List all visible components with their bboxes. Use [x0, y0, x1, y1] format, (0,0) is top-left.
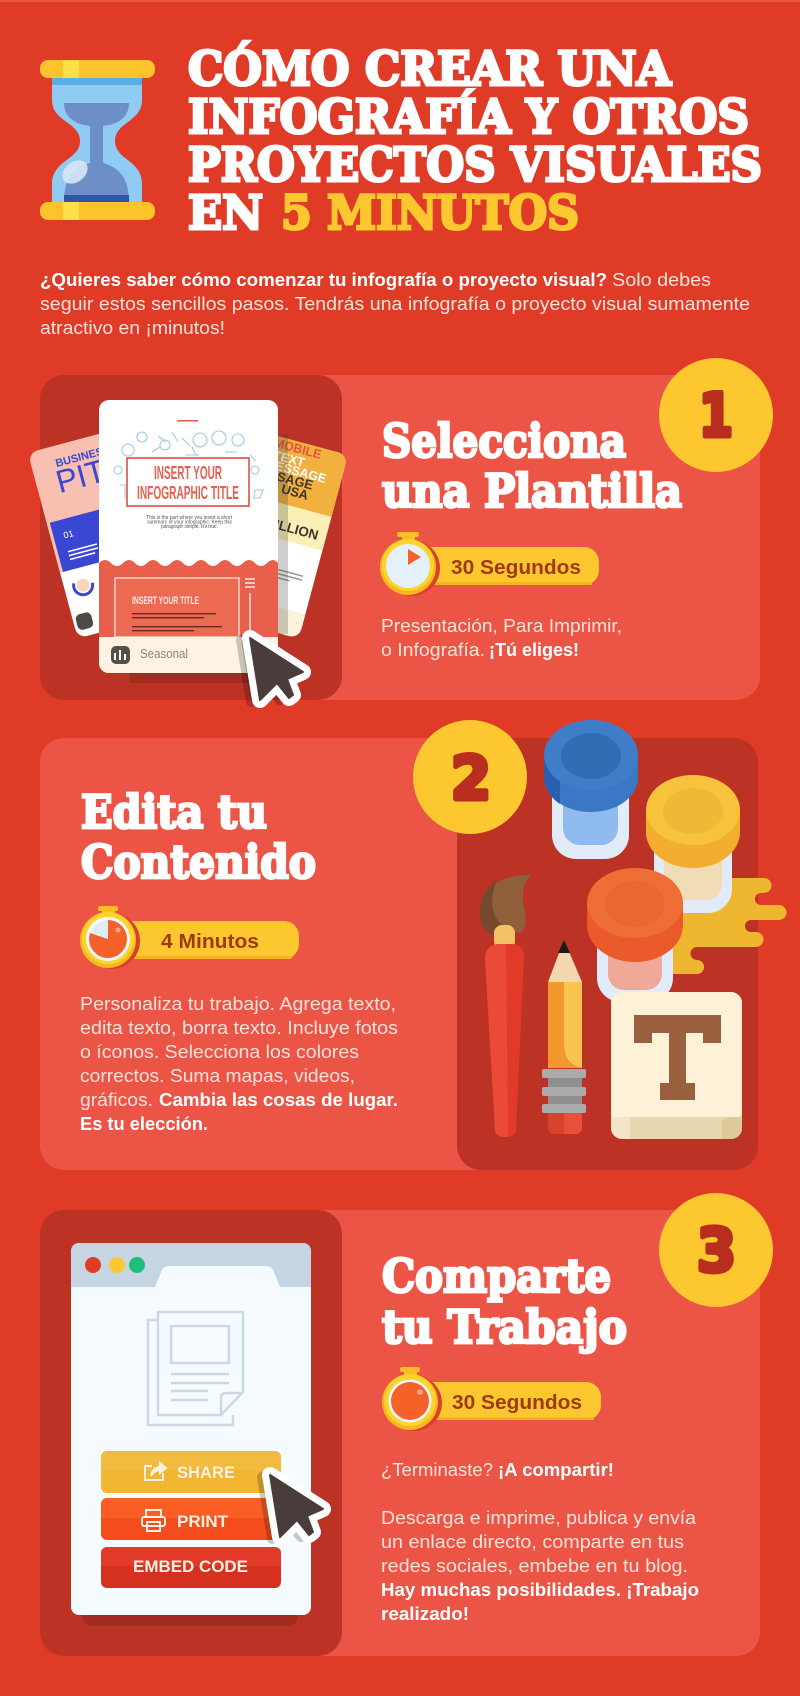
main card: [99, 400, 278, 673]
title: CÓMO CREAR UNA: [188, 41, 671, 97]
description: Personaliza tu trabajo. Agrega texto,: [80, 994, 396, 1014]
heading: [81, 785, 316, 889]
icon: paint splash: [673, 878, 786, 974]
panel background: [270, 1210, 760, 1656]
description: un enlace directo, comparte en tus: [381, 1532, 684, 1552]
title: PROYECTOS VISUALES: [188, 138, 762, 193]
description: gráficos.: [80, 1090, 153, 1110]
left card: 01: [62, 528, 75, 540]
heading: una Plantilla: [382, 464, 682, 518]
icon: document: [148, 1312, 243, 1425]
button: embed code: EMBED CODE: [133, 1557, 248, 1576]
intro text: ¿Quieres saber cómo comenzar tu infografía o proyecto visual?: [40, 270, 607, 290]
intro text: [40, 270, 750, 338]
description: Presentación, Para Imprimir,: [381, 616, 622, 636]
heading: Selecciona: [382, 414, 626, 468]
timer: 30 seconds: [382, 1367, 601, 1431]
button: print: [101, 1498, 281, 1540]
right card: IN USA: [264, 477, 311, 503]
left card: PITCH: [52, 440, 154, 500]
description: redes sociales, embebe en tu blog.: [381, 1556, 688, 1576]
icon: paint brush: [480, 875, 531, 1137]
description: ¡Tú eliges!: [489, 640, 579, 660]
image panel: [40, 375, 342, 700]
button: embed code: [101, 1547, 281, 1588]
main card: summary of your infographic. Keep this: [147, 520, 232, 526]
icon: hourglass: [40, 60, 155, 220]
right card: TEXT: [272, 448, 307, 470]
step number 2: 2: [451, 744, 491, 814]
button: print: PRINT: [177, 1512, 229, 1531]
step number 1: [659, 358, 773, 472]
button: share: [101, 1451, 281, 1493]
right card: MESSAGE: [264, 456, 328, 486]
image panel: [40, 1210, 342, 1656]
description: [80, 994, 398, 1134]
right card: BILLION: [264, 514, 320, 543]
title: EN: [188, 186, 263, 241]
description: Descarga e imprime, publica y envía: [381, 1508, 697, 1528]
panel: step 2: [40, 720, 786, 1170]
panel background: [270, 375, 760, 700]
description: Hay muchas posibilidades. ¡Trabajo: [381, 1580, 699, 1600]
main card: INFOGRAPHIC TITLE: [137, 483, 239, 503]
left card: [28, 406, 252, 638]
main card: INSERT YOUR: [154, 463, 222, 483]
heading: Edita tu: [81, 785, 267, 839]
step number 2: [413, 720, 527, 834]
heading: Contenido: [81, 835, 316, 889]
timer: 4 minutes: 4 Minutos: [161, 931, 259, 953]
browser window: [71, 1243, 311, 1626]
seasonal icon: [111, 646, 130, 664]
icon: blue paint jar: [544, 720, 638, 859]
step number 1: 1: [699, 381, 733, 451]
description: ¡A compartir!: [498, 1460, 614, 1480]
description: o Infografía.: [381, 640, 485, 660]
main card: INSERT YOUR TITLE: [132, 595, 199, 607]
intro text: Solo debes: [612, 270, 711, 290]
timer: 30 seconds: 30 Segundos: [452, 1392, 582, 1414]
right card: MOBILE: [272, 436, 323, 462]
icon: pencil: [542, 940, 586, 1134]
description: realizado!: [381, 1604, 469, 1624]
panel: step 1: [28, 358, 773, 702]
step number 3: [659, 1193, 773, 1307]
title: [188, 41, 762, 241]
icon: cursor: [262, 1475, 323, 1539]
timer: 4 minutes: [80, 906, 299, 969]
heading: [382, 414, 682, 518]
card shadow: [278, 434, 288, 634]
button: share: SHARE: [177, 1463, 235, 1482]
description: ¿Terminaste?: [381, 1460, 493, 1480]
right card: [125, 408, 348, 639]
right card: USAGE: [266, 466, 315, 493]
description: Es tu elección.: [80, 1114, 208, 1134]
panel background: [40, 738, 500, 1170]
description: Cambia las cosas de lugar.: [159, 1090, 398, 1110]
art panel: [457, 738, 758, 1170]
intro text: atractivo en ¡minutos!: [40, 318, 225, 338]
description: correctos. Suma mapas, videos,: [80, 1066, 355, 1086]
description: [381, 1460, 699, 1624]
icon: orange paint jar: [587, 868, 683, 1002]
heading: tu Trabajo: [382, 1300, 627, 1354]
template cards: [28, 400, 348, 683]
description: o íconos. Selecciona los colores: [80, 1042, 359, 1062]
left card: BUSINESS: [54, 444, 112, 470]
heading: [382, 1249, 627, 1354]
step number 3: 3: [697, 1216, 736, 1286]
window buttons: [85, 1257, 145, 1273]
main card: This is the part where you insert a short: [146, 515, 233, 521]
description: edita texto, borra texto. Incluye fotos: [80, 1018, 398, 1038]
icon: letter T tile: [611, 992, 742, 1139]
description: [381, 616, 622, 660]
icon: yellow paint jar: [646, 775, 740, 913]
title: INFOGRAFÍA Y OTROS: [188, 89, 749, 145]
timer: 30 seconds: 30 Segundos: [451, 557, 581, 579]
doodles: [114, 431, 263, 499]
intro text: seguir estos sencillos pasos. Tendrás una infografía o proyecto visual sumamente: [40, 294, 750, 314]
heading: Comparte: [382, 1249, 611, 1303]
main card: Seasonal: [140, 646, 188, 661]
title: 5 MINUTOS: [281, 186, 579, 241]
panel: step 3: [40, 1193, 773, 1656]
main card: paragraph simple. It's true.: [161, 524, 218, 530]
timer: 30 seconds: [380, 532, 599, 596]
icon: cursor: [241, 638, 303, 702]
